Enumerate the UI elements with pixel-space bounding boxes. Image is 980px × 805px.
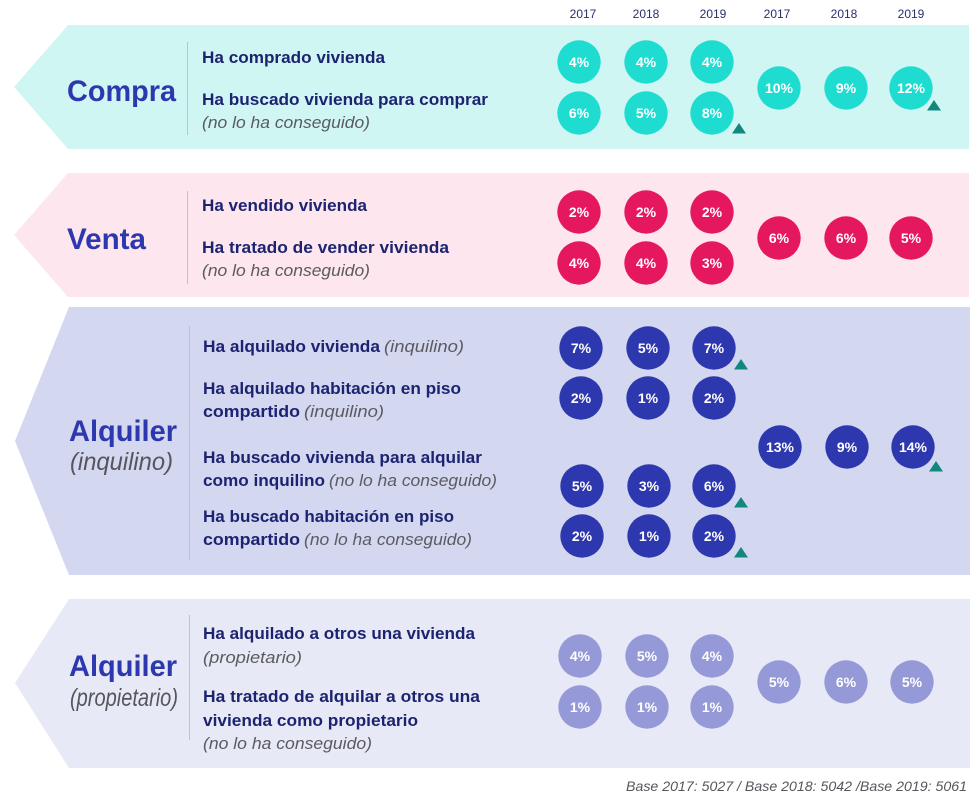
year headers: 2017 bbox=[570, 7, 597, 21]
values: Compra total: 9% bbox=[836, 80, 857, 96]
heading: Alquiler (inquilino): (inquilino) bbox=[70, 448, 173, 476]
year headers: 2019 bbox=[898, 7, 925, 21]
heading: Alquiler (propietario): (propietario) bbox=[70, 684, 178, 712]
values: Alquiler propietario per row: 1% bbox=[570, 699, 591, 715]
values: Venta per row: 4% bbox=[636, 255, 657, 271]
values: Compra per row: 6% bbox=[569, 105, 590, 121]
values: Alquiler inquilino total: 9% bbox=[837, 439, 858, 455]
values: Alquiler inquilino total bbox=[758, 425, 935, 469]
year headers: 2017 bbox=[764, 7, 791, 21]
values: Venta per row: 4% bbox=[569, 255, 590, 271]
icon: up triangle bbox=[734, 497, 748, 508]
heading: Alquiler (propietario) bbox=[69, 650, 178, 712]
year headers: 2018 bbox=[633, 7, 660, 21]
row labels: Alquiler propietario: Ha tratado de alquilar a otros una bbox=[203, 687, 481, 706]
row labels: Compra: (no lo ha conseguido) bbox=[202, 113, 370, 132]
footnote: base sizes: Base 2017: 5027 / Base 2018: 5042 /Base 2019: 5061 bbox=[626, 778, 967, 794]
row labels: Alquiler inquilino: (no lo ha conseguido) bbox=[304, 530, 472, 549]
row labels: Alquiler propietario bbox=[203, 624, 481, 753]
values: Alquiler inquilino total: 13% bbox=[766, 439, 795, 455]
values: Compra total bbox=[757, 66, 933, 110]
row labels: Alquiler inquilino: compartido bbox=[203, 530, 300, 549]
values: Compra per row: 4% bbox=[569, 54, 590, 70]
row labels: Alquiler inquilino: (inquilino) bbox=[384, 337, 464, 356]
values: Alquiler inquilino per row: 7% bbox=[704, 340, 725, 356]
icon: up triangle bbox=[732, 123, 746, 134]
row labels: Alquiler inquilino: (inquilino) bbox=[304, 402, 384, 421]
values: Venta total: 5% bbox=[901, 230, 922, 246]
panel: Alquiler propietario bbox=[15, 599, 970, 768]
values: Venta per row: 2% bbox=[569, 204, 590, 220]
values: Alquiler propietario total: 5% bbox=[769, 674, 790, 690]
values: Alquiler inquilino per row: 2% bbox=[571, 390, 592, 406]
values: Alquiler propietario total: 6% bbox=[836, 674, 857, 690]
row labels: Compra: Ha comprado vivienda bbox=[202, 48, 386, 67]
values: Alquiler inquilino per row: 5% bbox=[638, 340, 659, 356]
row labels: Alquiler propietario: (propietario) bbox=[203, 648, 302, 667]
year headers: 2018 bbox=[831, 7, 858, 21]
row labels: Venta: (no lo ha conseguido) bbox=[202, 261, 370, 280]
values: Alquiler inquilino per row: 2% bbox=[704, 390, 725, 406]
row labels: Alquiler inquilino: Ha alquilado vivienda bbox=[203, 337, 381, 356]
row labels: Alquiler inquilino: Ha alquilado habitación en piso bbox=[203, 379, 461, 398]
row labels: Alquiler propietario: vivienda como propietario bbox=[203, 711, 418, 730]
heading: Venta: Venta bbox=[67, 223, 146, 256]
values: Venta total: 6% bbox=[769, 230, 790, 246]
row labels: Alquiler inquilino: compartido bbox=[203, 402, 300, 421]
values: Alquiler propietario per row bbox=[558, 634, 734, 729]
panel: Alquiler inquilino bbox=[15, 307, 970, 575]
values: Venta total: 6% bbox=[836, 230, 857, 246]
values: Alquiler inquilino per row: 1% bbox=[638, 390, 659, 406]
values: Alquiler propietario total bbox=[757, 660, 934, 704]
row labels: Alquiler inquilino bbox=[203, 337, 497, 549]
values: Venta per row: 3% bbox=[702, 255, 723, 271]
values: Compra per row bbox=[557, 40, 734, 135]
values: Alquiler inquilino per row: 5% bbox=[572, 478, 593, 494]
row labels: Venta: Ha tratado de vender vivienda bbox=[202, 238, 450, 257]
values: Alquiler inquilino per row bbox=[559, 326, 736, 558]
year headers: 2019 bbox=[700, 7, 727, 21]
values: Alquiler propietario per row: 4% bbox=[570, 648, 591, 664]
values: Alquiler inquilino per row: 1% bbox=[639, 528, 660, 544]
values: Alquiler inquilino per row: 2% bbox=[572, 528, 593, 544]
panel: Venta bbox=[14, 173, 969, 297]
values: Venta total bbox=[757, 216, 933, 260]
values: Compra per row: 4% bbox=[702, 54, 723, 70]
values: Alquiler inquilino per row: 3% bbox=[639, 478, 660, 494]
row labels: Venta: Ha vendido vivienda bbox=[202, 196, 368, 215]
heading: Alquiler (propietario): Alquiler bbox=[69, 650, 177, 683]
row labels: Compra bbox=[202, 48, 488, 132]
values: Alquiler inquilino per row: 7% bbox=[571, 340, 592, 356]
icon: up triangle bbox=[929, 461, 943, 472]
values: Compra total: 12% bbox=[897, 80, 926, 96]
values: Compra per row: 8% bbox=[702, 105, 723, 121]
values: Alquiler inquilino per row: 2% bbox=[704, 528, 725, 544]
icon: up triangle bbox=[734, 359, 748, 370]
values: Alquiler propietario per row: 4% bbox=[702, 648, 723, 664]
icon: up triangle bbox=[734, 547, 748, 558]
values: Alquiler propietario per row: 1% bbox=[702, 699, 723, 715]
values: Alquiler inquilino per row: 6% bbox=[704, 478, 725, 494]
row labels: Alquiler propietario: (no lo ha conseguido) bbox=[203, 734, 372, 753]
values: Alquiler propietario total: 5% bbox=[902, 674, 923, 690]
values: Venta per row: 2% bbox=[636, 204, 657, 220]
values: Compra per row: 5% bbox=[636, 105, 657, 121]
values: Alquiler inquilino total: 14% bbox=[899, 439, 928, 455]
heading: Alquiler (inquilino): Alquiler bbox=[69, 415, 177, 448]
row labels: Venta bbox=[202, 196, 450, 280]
values: Alquiler propietario per row: 1% bbox=[637, 699, 658, 715]
row labels: Alquiler inquilino: Ha buscado vivienda para alquilar bbox=[203, 448, 482, 467]
values: Alquiler propietario per row: 5% bbox=[637, 648, 658, 664]
values: Compra per row: 4% bbox=[636, 54, 657, 70]
panel: Compra bbox=[14, 25, 969, 149]
values: Venta per row: 2% bbox=[702, 204, 723, 220]
row labels: Alquiler inquilino: Ha buscado habitación en piso bbox=[203, 507, 454, 526]
row labels: Compra: Ha buscado vivienda para comprar bbox=[202, 90, 488, 109]
values: Compra total: 10% bbox=[765, 80, 794, 96]
row labels: Alquiler inquilino: como inquilino bbox=[203, 471, 325, 490]
row labels: Alquiler propietario: Ha alquilado a otros una vivienda bbox=[203, 624, 476, 643]
heading: Alquiler (inquilino) bbox=[69, 415, 177, 476]
values: Venta per row bbox=[557, 190, 734, 285]
heading: Compra: Compra bbox=[67, 75, 176, 108]
row labels: Alquiler inquilino: (no lo ha conseguido) bbox=[329, 471, 497, 490]
icon: up triangle bbox=[927, 100, 941, 110]
year headers bbox=[570, 7, 925, 21]
